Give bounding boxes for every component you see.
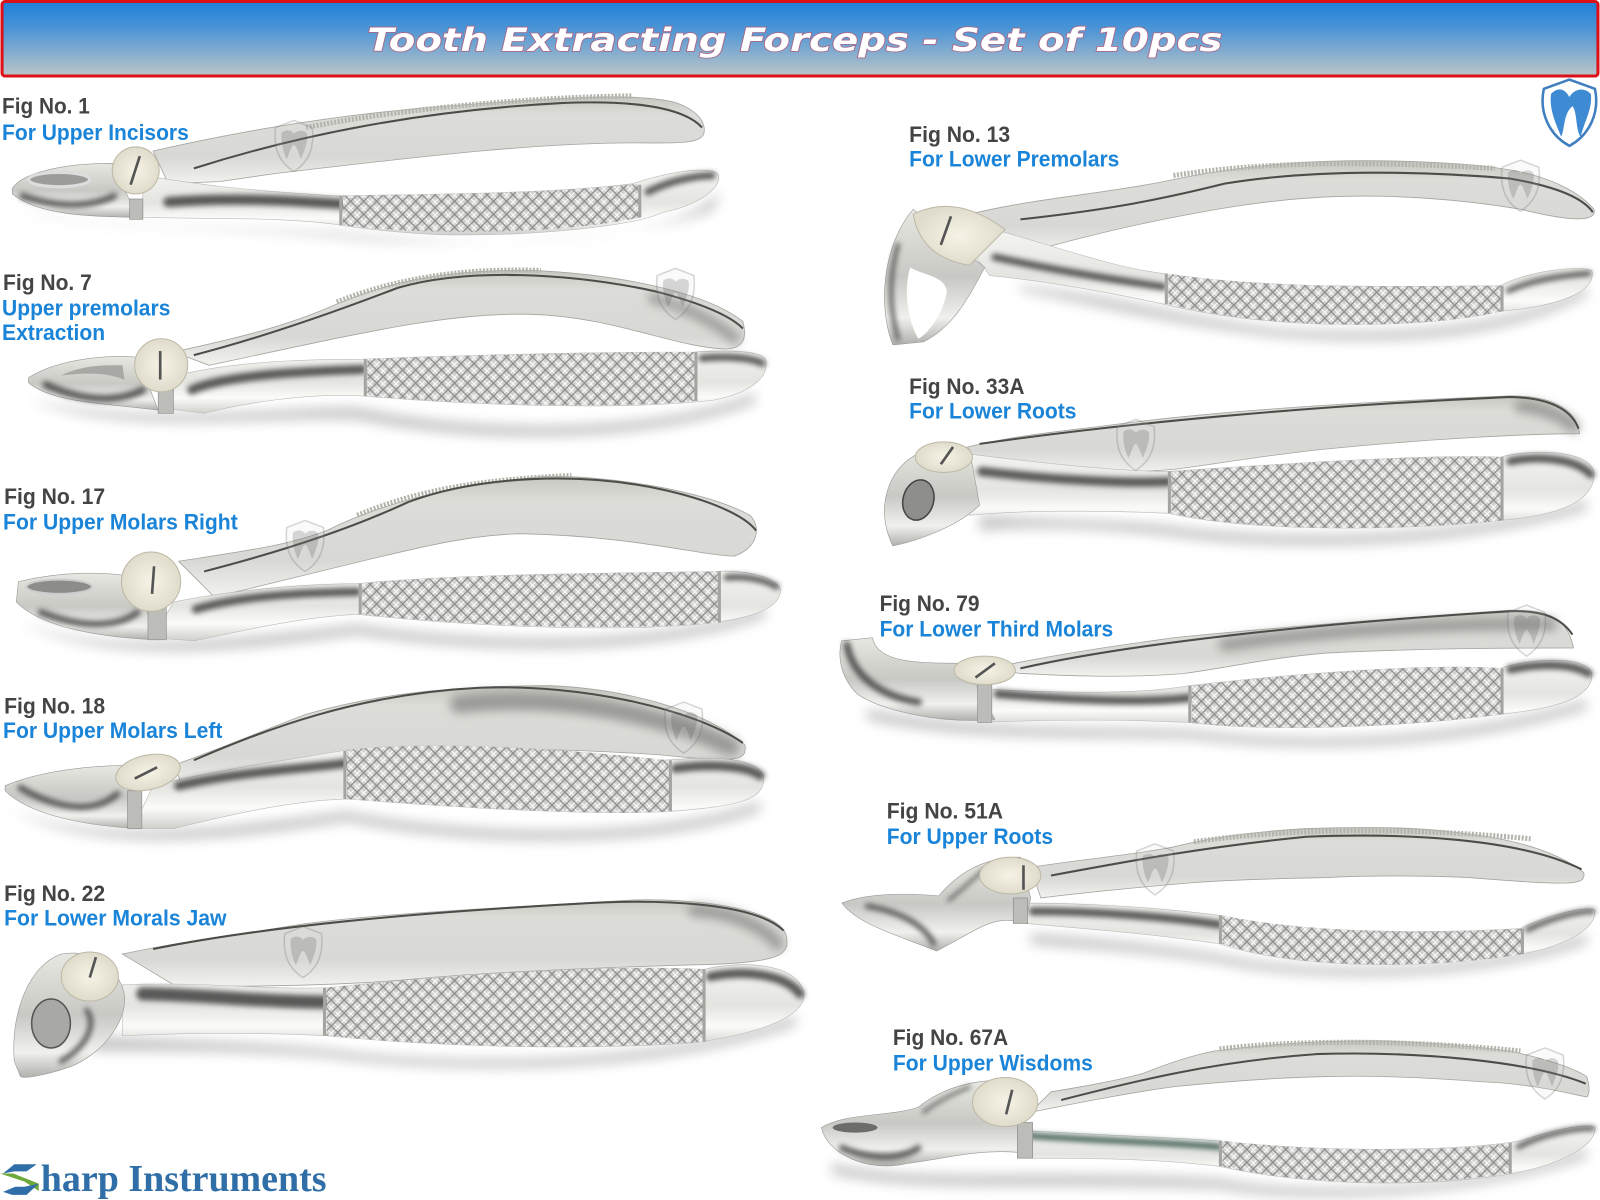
label: Fig No. 13: For Lower Premolars [909, 146, 1119, 171]
forceps: Fig 51A [842, 828, 1595, 976]
forceps: Fig 18 [5, 686, 764, 840]
label: Fig No. 22 [4, 881, 227, 931]
label: Fig No. 33A: For Lower Roots [909, 398, 1077, 423]
label: Fig No. 79: Fig No. 79 [880, 591, 980, 616]
label: Fig No. 1: For Upper Incisors [2, 120, 189, 145]
label: Fig No. 18 [3, 693, 223, 743]
label: Fig No. 67A: Fig No. 67A [893, 1025, 1008, 1050]
panel: Fig No. 51A [842, 798, 1595, 976]
label: Fig No. 79: For Lower Third Molars [880, 617, 1113, 642]
logo: Sharp Instruments [0, 1158, 327, 1200]
panel: Fig No. 18 [3, 686, 764, 840]
label: Fig No. 7: Fig No. 7 [3, 270, 92, 295]
forceps: Fig 67A [821, 1041, 1595, 1197]
forceps: Fig 79 [840, 605, 1592, 747]
panel: Fig No. 13 [884, 122, 1594, 345]
label: Fig No. 22: For Lower Morals Jaw [4, 906, 227, 931]
label: Fig No. 17: For Upper Molars Right [3, 510, 238, 535]
label: Fig No. 17 [3, 484, 238, 535]
label: Fig No. 51A [887, 798, 1053, 849]
panel: Fig No. 17 [3, 476, 781, 651]
label: Fig No. 7: Upper premolars [2, 295, 170, 320]
label: Fig No. 33A: Fig No. 33A [909, 374, 1024, 399]
label: Fig No. 17: Fig No. 17 [4, 484, 105, 509]
label: Fig No. 18: For Upper Molars Left [3, 718, 223, 743]
icon: tooth shield logo [1543, 80, 1596, 146]
panel: Fig No. 7 [2, 268, 766, 436]
label: Fig No. 67A [893, 1025, 1093, 1075]
label: Fig No. 33A [909, 374, 1077, 423]
brand name: harp Instruments [41, 1158, 327, 1200]
panel: Fig No. 67A [821, 1025, 1595, 1197]
label: Fig No. 67A: For Upper Wisdoms [893, 1050, 1093, 1075]
forceps: Fig 13 [884, 160, 1594, 345]
forceps: Fig 22 [14, 900, 804, 1077]
label: Fig No. 1: Fig No. 1 [2, 93, 90, 118]
label: Fig No. 51A: For Upper Roots [887, 824, 1053, 849]
forceps: Fig 33A [884, 396, 1594, 546]
title: Tooth Extracting Forceps - Set of 10pcs [367, 21, 1222, 59]
label: Fig No. 51A: Fig No. 51A [887, 798, 1003, 823]
label: Fig No. 7: Extraction [2, 320, 105, 345]
label: Fig No. 22: Fig No. 22 [4, 881, 105, 906]
label: Fig No. 7 [2, 270, 170, 345]
label: Fig No. 13 [909, 122, 1119, 171]
title banner [2, 2, 1598, 76]
panel: Fig No. 1 [2, 93, 719, 242]
label: Fig No. 1 [2, 93, 189, 145]
panel: Fig No. 22 [4, 881, 804, 1077]
label: Fig No. 18: Fig No. 18 [4, 693, 105, 718]
forceps: Fig 1 [12, 96, 719, 242]
panel: Fig No. 33A [884, 374, 1594, 546]
icon: S mark [0, 1164, 39, 1195]
forceps: Fig 7 [29, 268, 766, 436]
panel: Fig No. 79 [840, 591, 1592, 747]
forceps: Fig 17 [16, 476, 781, 651]
label: Fig No. 79 [880, 591, 1113, 642]
label: Fig No. 13: Fig No. 13 [909, 122, 1010, 147]
